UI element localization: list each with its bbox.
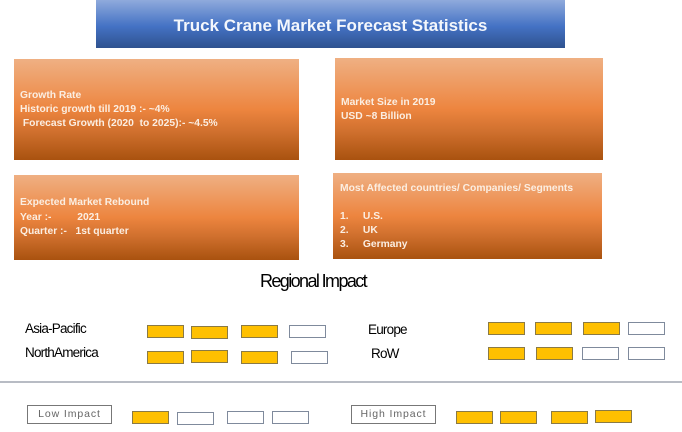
title banner: Truck Crane Market Forecast Statistics <box>174 16 487 35</box>
row: RoW rating <box>488 347 665 360</box>
legend key: high impact: High Impact <box>361 408 426 420</box>
legend key: high impact <box>351 405 436 424</box>
row: Asia-Pacific rating <box>147 325 326 339</box>
market size text: Market Size in 2019 USD ~8 Billion <box>341 97 435 122</box>
legend: low impact bars <box>132 411 309 425</box>
heading: regional impact: Regional Impact <box>260 271 366 291</box>
panel: expected market rebound <box>14 175 299 260</box>
label: Europe: Europe <box>368 322 407 337</box>
label: RoW: RoW <box>371 346 399 361</box>
rebound text: Expected Market Rebound Year :- 2021 Quarter :- 1st quarter <box>20 197 149 237</box>
legend: high impact bars <box>456 410 632 424</box>
panel: most affected <box>333 173 602 259</box>
title banner <box>96 0 565 48</box>
legend key: low impact: Low Impact <box>38 408 101 420</box>
row: North America rating <box>147 350 328 364</box>
label: North America: NorthAmerica <box>25 345 98 360</box>
label: Asia-Pacific: Asia-Pacific <box>25 321 86 336</box>
most affected list: 1. U.S. 2. UK 3. Germany <box>340 211 408 250</box>
row: Europe rating <box>488 322 665 335</box>
growth rate text: Growth Rate Historic growth till 2019 :- ~4% Forecast Growth (2020 to 2025):- ~4.5% <box>20 90 218 129</box>
panel: growth rate <box>14 59 299 160</box>
most affected heading: Most Affected countries/ Companies/ Segments <box>340 183 573 194</box>
panel: market size <box>335 58 603 160</box>
legend key: low impact <box>27 405 112 424</box>
